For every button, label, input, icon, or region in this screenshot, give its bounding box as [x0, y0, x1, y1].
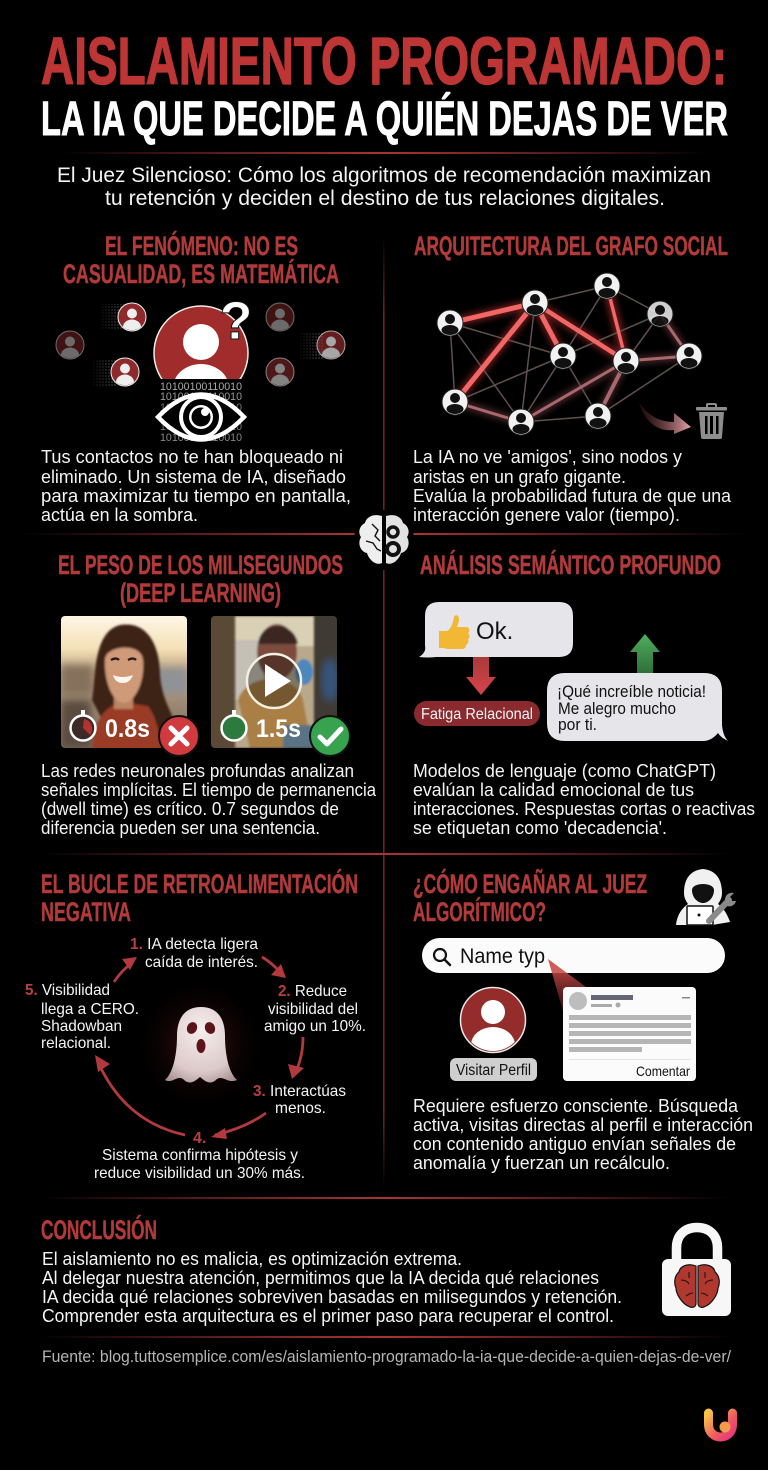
text: grafo body: aristas en un grafo gigante.: [413, 466, 626, 487]
icon: fading contacts: [56, 303, 345, 386]
heading: conclusión: CONCLUSIÓN: [41, 1214, 157, 1245]
text: semántico body: Modelos de lenguaje (como ChatGPT): [413, 760, 716, 781]
panel: bucle de retroalimentación: [25, 868, 366, 1182]
text: fenómeno body: para maximizar tu tiempo en pantalla,: [41, 485, 351, 506]
arrow: red wedge: [548, 959, 586, 1018]
step 2: amigo un 10%.: [264, 1018, 366, 1035]
step 1: [130, 936, 258, 971]
profile avatar: [460, 988, 526, 1063]
heading: bucle: NEGATIVA: [41, 897, 131, 927]
arrows: feedback cycle: [95, 957, 304, 1139]
arrow: up green: [630, 634, 660, 673]
step 2: [264, 983, 366, 1035]
arrow: to trash: [639, 402, 691, 434]
text: conclusión body: Comprender esta arquitectura es el primer paso para recuperar el control.: [42, 1305, 614, 1326]
icon: eye over binary code: 10100100110010: [160, 402, 242, 414]
step 3: 3. Interactúas: [253, 1083, 346, 1100]
search bar: Name typ: [460, 944, 545, 968]
icon: trash can: [696, 403, 727, 439]
text: engañar body: [413, 1095, 753, 1173]
icon: eye over binary code: 10100100110010: [160, 432, 242, 444]
button: visitar perfil: [450, 1058, 537, 1081]
heading: el fenómeno: [63, 230, 339, 289]
text: grafo body: [413, 446, 732, 525]
step 2: 2. Reduce: [278, 983, 347, 1000]
icon: central profile with question mark: [153, 301, 250, 379]
chat bubble: positive reply: por ti.: [558, 716, 597, 734]
text: grafo body: interacción genere valor (tiempo).: [413, 504, 680, 525]
heading: milisegundos: EL PESO DE LOS MILISEGUNDOS: [58, 550, 343, 580]
panel: el fenómeno: [41, 230, 351, 525]
heading: milisegundos: [58, 550, 343, 608]
icon: eye over binary code: 10100100110010: [160, 381, 242, 393]
label: fatiga relacional: Fatiga Relacional: [421, 706, 533, 723]
step 4: [94, 1130, 305, 1182]
photo: video thumbnail: [211, 616, 339, 748]
icon: green check: [310, 716, 350, 756]
text: engañar body: activa, visitas directas al perfil e interacción: [413, 1114, 753, 1135]
chat bubble: positive reply: [547, 673, 728, 741]
step 3: menos.: [275, 1100, 326, 1117]
step 2: visibilidad del: [268, 1001, 358, 1018]
icon: ghost: [132, 977, 268, 1113]
button: visitar perfil: Visitar Perfil: [456, 1062, 531, 1079]
panel: peso de los milisegundos: [41, 550, 377, 838]
chart: social graph network: [437, 273, 702, 435]
text: engañar body: Requiere esfuerzo consciente. Búsqueda: [413, 1095, 739, 1116]
heading: engañar: ¿CÓMO ENGAÑAR AL JUEZ: [413, 868, 647, 899]
step 1: 1. IA detecta ligera: [130, 936, 258, 953]
chat bubble: ok: Ok.: [476, 618, 513, 645]
panel: análisis semántico: [413, 549, 755, 838]
heading: bucle: EL BUCLE DE RETROALIMENTACIÓN: [41, 868, 358, 899]
step 3: [253, 1083, 346, 1117]
text: grafo body: Evalúa la probabilidad futura de que una: [413, 485, 732, 506]
label: fatiga relacional: [414, 701, 540, 726]
text: fenómeno body: actúa en la sombra.: [41, 504, 198, 525]
text: milisegundos body: (dwell time) es crítico. 0.7 segundos de: [41, 798, 339, 819]
text: conclusión body: El aislamiento no es malicia, es optimización extrema.: [42, 1248, 462, 1269]
icon: red cross: [159, 716, 199, 756]
source line: Fuente: blog.tuttosemplice.com/es/aislamiento-programado-la-ia-que-decide-a-quien-dejas-de-ver/: [42, 1348, 731, 1366]
text: semántico body: se etiquetan como 'decadencia'.: [413, 817, 667, 838]
text: milisegundos body: señales implícitas. El tiempo de permanencia: [41, 779, 377, 800]
text: semántico body: [413, 760, 755, 838]
text: milisegundos body: diferencia pueden ser una sentencia.: [41, 817, 320, 838]
step 4: Sistema confirma hipótesis y: [102, 1147, 298, 1164]
timer: 0.8s: [70, 710, 150, 743]
heading: milisegundos: (DEEP LEARNING): [120, 578, 281, 608]
step 5: [25, 982, 139, 1052]
icon: play button: [247, 654, 301, 708]
step 5: Shadowban: [41, 1018, 122, 1035]
timer: 1.5s: [222, 710, 301, 743]
post card: Comentar: [636, 1063, 690, 1079]
icon: hacker with wrench: [676, 869, 736, 925]
icon: eye over binary code: 10100100110010: [160, 391, 242, 403]
icon: eye over binary code: 10100100110010: [160, 421, 242, 433]
chat bubble: positive reply: Me alegro mucho: [558, 700, 676, 718]
photo: smiling woman: [61, 616, 187, 750]
heading: el fenómeno: EL FENÓMENO: NO ES: [105, 230, 298, 261]
icon: logo: [708, 1413, 732, 1437]
text: milisegundos body: Las redes neuronales profundas analizan: [41, 760, 354, 781]
text: fenómeno body: [41, 446, 351, 525]
subtitle: tu retención y deciden el destino de tus relaciones digitales.: [105, 186, 665, 210]
step 1: caída de interés.: [145, 954, 258, 971]
text: conclusión body: [42, 1248, 622, 1326]
step 5: 5. Visibilidad: [25, 982, 110, 999]
text: semántico body: evalúan la calidad emocional de tus: [413, 779, 694, 800]
title: [41, 24, 728, 146]
chat bubble: positive reply: ¡Qué increíble noticia!: [557, 683, 706, 701]
arrow: down red: [466, 657, 496, 695]
text: conclusión body: IA decida qué relaciones sobreviven basadas en milisegundos y retención.: [42, 1286, 622, 1307]
step 4: reduce visibilidad un 30% más.: [94, 1165, 305, 1182]
panel: cómo engañar: [413, 868, 753, 1173]
step 4: 4.: [193, 1130, 206, 1147]
chat bubble: ok: [419, 602, 573, 658]
text: fenómeno body: eliminado. Un sistema de IA, diseñado: [41, 466, 346, 487]
heading: bucle: [41, 868, 358, 927]
text: engañar body: con contenido antiguo envían señales de: [413, 1133, 736, 1154]
timer: 1.5s: 1.5s: [256, 715, 301, 743]
heading: engañar: ALGORÍTMICO?: [413, 896, 546, 927]
panel: conclusión: [41, 1214, 731, 1326]
heading: el fenómeno: CASUALIDAD, ES MATEMÁTICA: [63, 258, 339, 289]
icon: central brain with gears: [354, 510, 414, 570]
timer: 0.8s: 0.8s: [105, 715, 150, 743]
step 5: llega a CERO.: [41, 1001, 139, 1018]
icon: eye over binary code: [158, 381, 244, 444]
icon: central profile with question mark: ?: [220, 291, 252, 351]
text: conclusión body: Al delegar nuestra atención, permitimos que la IA decida qué relaciones: [42, 1267, 599, 1288]
post card: [563, 987, 696, 1081]
text: fenómeno body: Tus contactos no te han bloqueado ni: [41, 446, 343, 467]
text: milisegundos body: [41, 760, 377, 838]
text: engañar body: anomalía y fuerzan un recálculo.: [413, 1152, 670, 1173]
search bar: [422, 938, 725, 973]
step 5: relacional.: [41, 1035, 111, 1052]
subtitle: [57, 163, 711, 210]
heading: engañar: [413, 868, 647, 927]
subtitle: El Juez Silencioso: Cómo los algoritmos de recomendación maximizan: [57, 163, 711, 187]
icon: lock with brain: [662, 1228, 731, 1316]
text: grafo body: La IA no ve 'amigos', sino nodos y: [413, 446, 683, 467]
panel: arquitectura del grafo social: [413, 231, 732, 525]
